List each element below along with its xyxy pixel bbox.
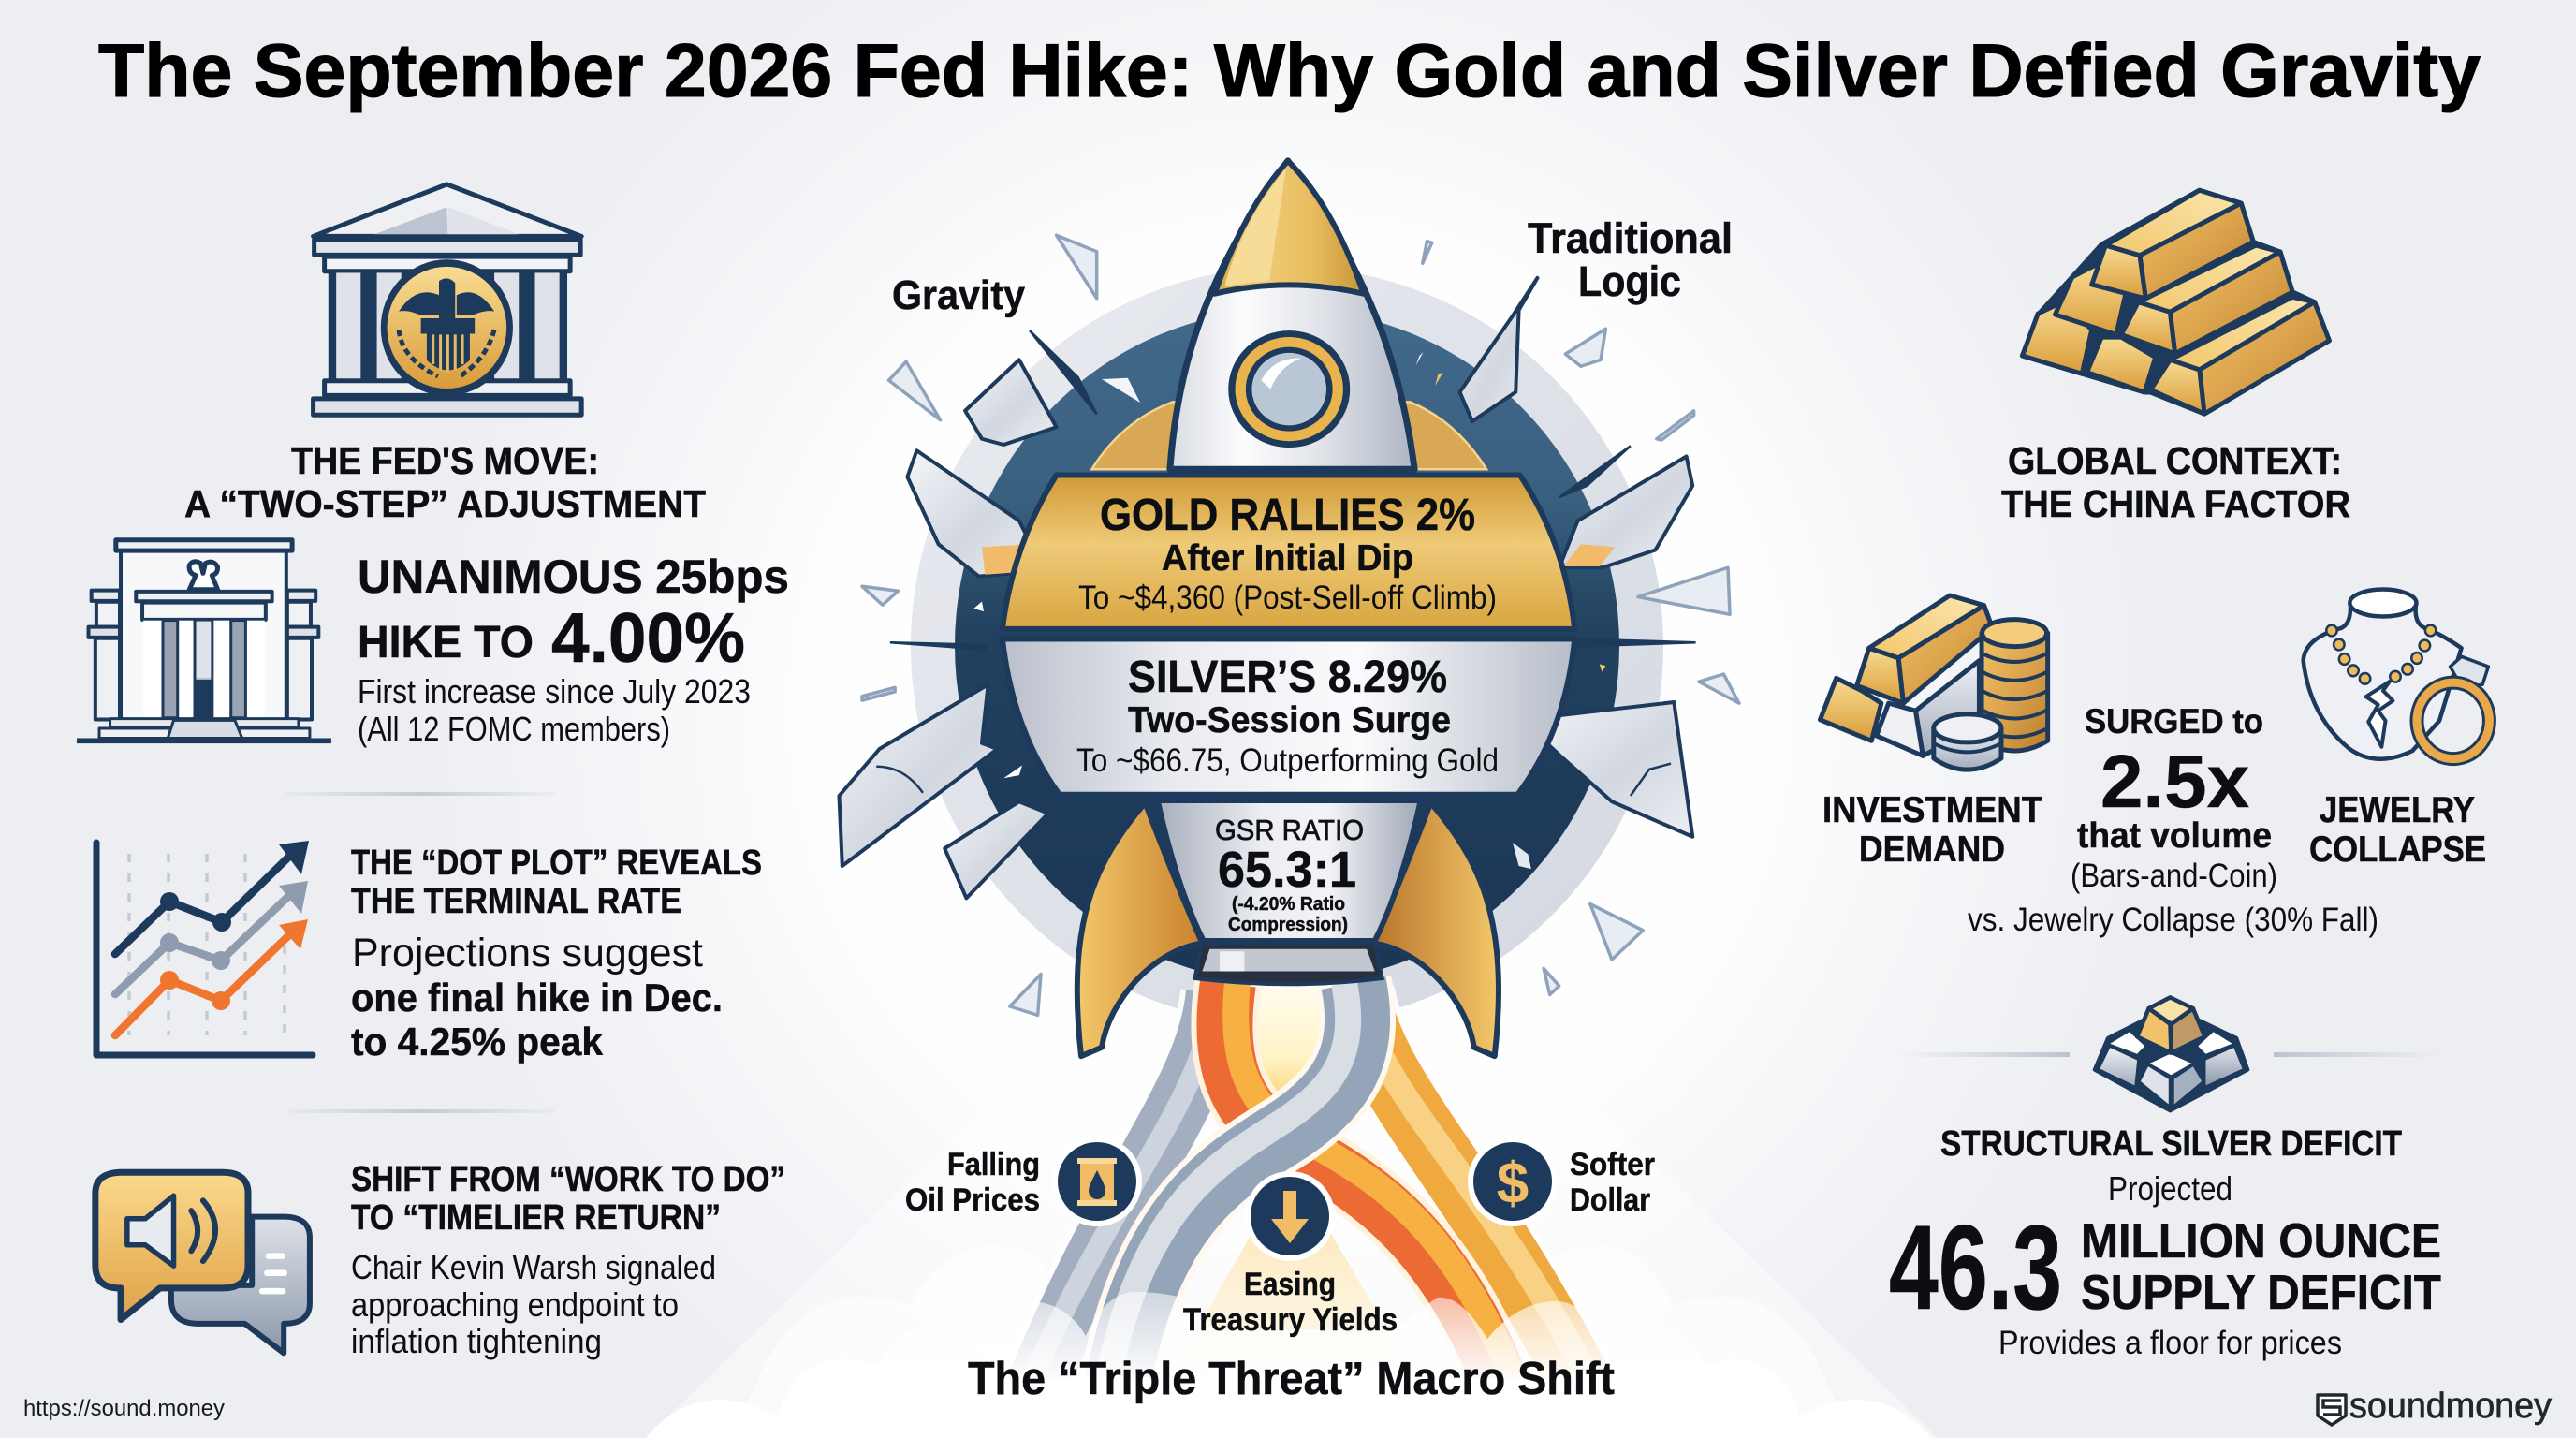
callout: silver surge <box>1076 653 1499 779</box>
illustration: far cloud layer <box>730 1245 1853 1438</box>
callout: silver surge: To ~$66.75, Outperforming Gold <box>1076 742 1499 779</box>
illustration: near clouds <box>646 1292 1931 1438</box>
callout: silver surge: SILVER’S 8.29% <box>1128 653 1447 702</box>
label: investment demand: DEMAND <box>1859 829 2005 870</box>
illustration: exhaust ribbons <box>1020 983 1603 1404</box>
stat: surged 2.5x: that volume <box>2077 816 2272 856</box>
text: shift in language: approaching endpoint to <box>351 1285 679 1324</box>
icon: softer dollar: $ <box>1497 1152 1529 1216</box>
stat: surged 2.5x <box>2071 702 2277 894</box>
stat: unanimous hike: 4.00% <box>551 598 745 677</box>
panel: global context <box>1820 190 2489 938</box>
text: dot plot: one final hike in Dec. <box>351 976 723 1020</box>
label: traditional logic: Traditional <box>1528 214 1733 262</box>
icon: Federal Reserve temple with seal <box>314 184 581 415</box>
label: traditional logic <box>1528 214 1733 305</box>
silver banner <box>1003 638 1574 795</box>
stat: unanimous hike: HIKE TO <box>358 618 534 668</box>
illustration: rocket <box>1003 161 1574 1056</box>
text: shift in language: TO “TIMELIER RETURN” <box>351 1198 721 1238</box>
left fin <box>1077 803 1202 1056</box>
text: versus jewelry: vs. Jewelry Collapse (30% Fall) <box>1968 902 2378 938</box>
icon: gold bar pile <box>2022 190 2329 414</box>
stat: unanimous hike: (All 12 FOMC members) <box>358 710 670 748</box>
stat: surged 2.5x: SURGED to <box>2085 702 2263 741</box>
stat: unanimous hike <box>358 550 789 748</box>
heading: triple threat: The “Triple Threat” Macro Shift <box>968 1354 1615 1404</box>
icon: silver blocks with gold cap <box>2095 997 2247 1110</box>
label: easing treasury yields: Treasury Yields <box>1183 1302 1398 1338</box>
rocket window <box>1228 330 1350 448</box>
text: shift in language: inflation tightening <box>351 1322 602 1360</box>
label: jewelry collapse: COLLAPSE <box>2309 829 2486 870</box>
callout: gold rally: To ~$4,360 (Post-Sell-off Climb) <box>1078 580 1497 616</box>
logo: soundmoney: soundmoney <box>2349 1387 2552 1426</box>
panel: the Fed's move <box>77 184 789 1360</box>
source url: https://sound.money <box>23 1396 225 1421</box>
text: dot plot: THE TERMINAL RATE <box>351 882 681 921</box>
label: falling oil prices: Falling <box>947 1147 1040 1182</box>
stat: unanimous hike: First increase since July 2023 <box>358 672 751 711</box>
title: The September 2026 Fed Hike: Why Gold and Silver Defied Gravity <box>98 29 2481 113</box>
nozzle <box>1194 944 1383 984</box>
stat: 46.3 million ounce supply deficit: Projected <box>2108 1169 2232 1208</box>
heading: GLOBAL CONTEXT: <box>2008 439 2342 482</box>
illustration: ring wall behind rocket <box>911 267 1663 1025</box>
callout: GSR ratio: GSR RATIO <box>1215 814 1364 846</box>
icon: Eccles building <box>77 540 331 743</box>
label: softer dollar <box>1570 1147 1655 1218</box>
stat: 46.3 million ounce supply deficit: 46.3 <box>1889 1201 2062 1335</box>
engine section <box>1158 800 1421 941</box>
right fin <box>1373 803 1499 1056</box>
stat: surged 2.5x: 2.5x <box>2100 740 2249 823</box>
label: softer dollar: Dollar <box>1570 1182 1650 1218</box>
heading: A “TWO-STEP” ADJUSTMENT <box>184 482 706 525</box>
callout: silver surge: Two-Session Surge <box>1128 700 1451 741</box>
icon: broken necklace and ring <box>2304 590 2489 759</box>
label: easing treasury yields: Easing <box>1244 1267 1336 1302</box>
heading <box>184 439 706 525</box>
label: falling oil prices: Oil Prices <box>905 1182 1040 1218</box>
label: traditional logic: Logic <box>1578 257 1681 305</box>
text: dot plot <box>351 844 762 1064</box>
text: dot plot: to 4.25% peak <box>351 1020 604 1064</box>
gold banner <box>1003 476 1574 629</box>
callout: GSR ratio <box>1215 814 1364 935</box>
heading: STRUCTURAL SILVER DEFICIT <box>1940 1124 2402 1164</box>
label: jewelry collapse: JEWELRY <box>2320 790 2475 830</box>
text: dot plot: Projections suggest <box>352 931 703 976</box>
stat: 46.3 million ounce supply deficit: MILLION OUNCE <box>2081 1214 2441 1269</box>
icon: softer dollar <box>1468 1137 1558 1226</box>
icon: bars and coins <box>1820 595 2048 770</box>
stat: 46.3 million ounce supply deficit: SUPPLY DEFICIT <box>2081 1266 2441 1320</box>
panel: structural silver deficit <box>1889 997 2442 1361</box>
text: shift in language: Chair Kevin Warsh signaled <box>351 1248 716 1286</box>
callout: gold rally <box>1078 491 1497 616</box>
stat: unanimous hike: UNANIMOUS 25bps <box>358 550 789 603</box>
label: falling oil prices <box>905 1147 1040 1218</box>
callout: GSR ratio: 65.3:1 <box>1218 842 1356 898</box>
label: gravity: Gravity <box>892 272 1025 318</box>
text: shift in language: SHIFT FROM “WORK TO DO” <box>351 1160 785 1199</box>
label: jewelry collapse <box>2309 790 2486 870</box>
callout: gold rally: GOLD RALLIES 2% <box>1100 491 1475 540</box>
chart: dot plot <box>96 841 313 1055</box>
stat: 46.3 million ounce supply deficit <box>1889 1169 2441 1361</box>
callout: gold rally: After Initial Dip <box>1162 538 1413 579</box>
stat: surged 2.5x: (Bars-and-Coin) <box>2071 858 2277 894</box>
label: softer dollar: Softer <box>1570 1147 1655 1182</box>
text: dot plot: THE “DOT PLOT” REVEALS <box>351 844 762 883</box>
heading: THE CHINA FACTOR <box>2001 482 2350 525</box>
rocket shoulders <box>1091 402 1486 469</box>
label: investment demand: INVESTMENT <box>1822 790 2042 830</box>
heading: THE FED'S MOVE: <box>291 439 599 482</box>
callout: GSR ratio: (-4.20% Ratio <box>1232 894 1345 915</box>
rocket nose and body <box>1170 161 1414 469</box>
icon: falling oil prices <box>1052 1137 1142 1226</box>
icon: speech bubbles with speaker <box>95 1172 310 1353</box>
stat: 46.3 million ounce supply deficit: Provides a floor for prices <box>1998 1325 2342 1361</box>
icon: easing yields arrow <box>1245 1171 1335 1261</box>
text: shift in language <box>351 1160 785 1360</box>
label: easing treasury yields <box>1183 1267 1398 1338</box>
label: investment demand <box>1822 790 2042 870</box>
heading <box>2001 439 2350 525</box>
illustration: flying wall shards and debris <box>839 235 1739 1015</box>
callout: GSR ratio: Compression) <box>1228 915 1348 935</box>
